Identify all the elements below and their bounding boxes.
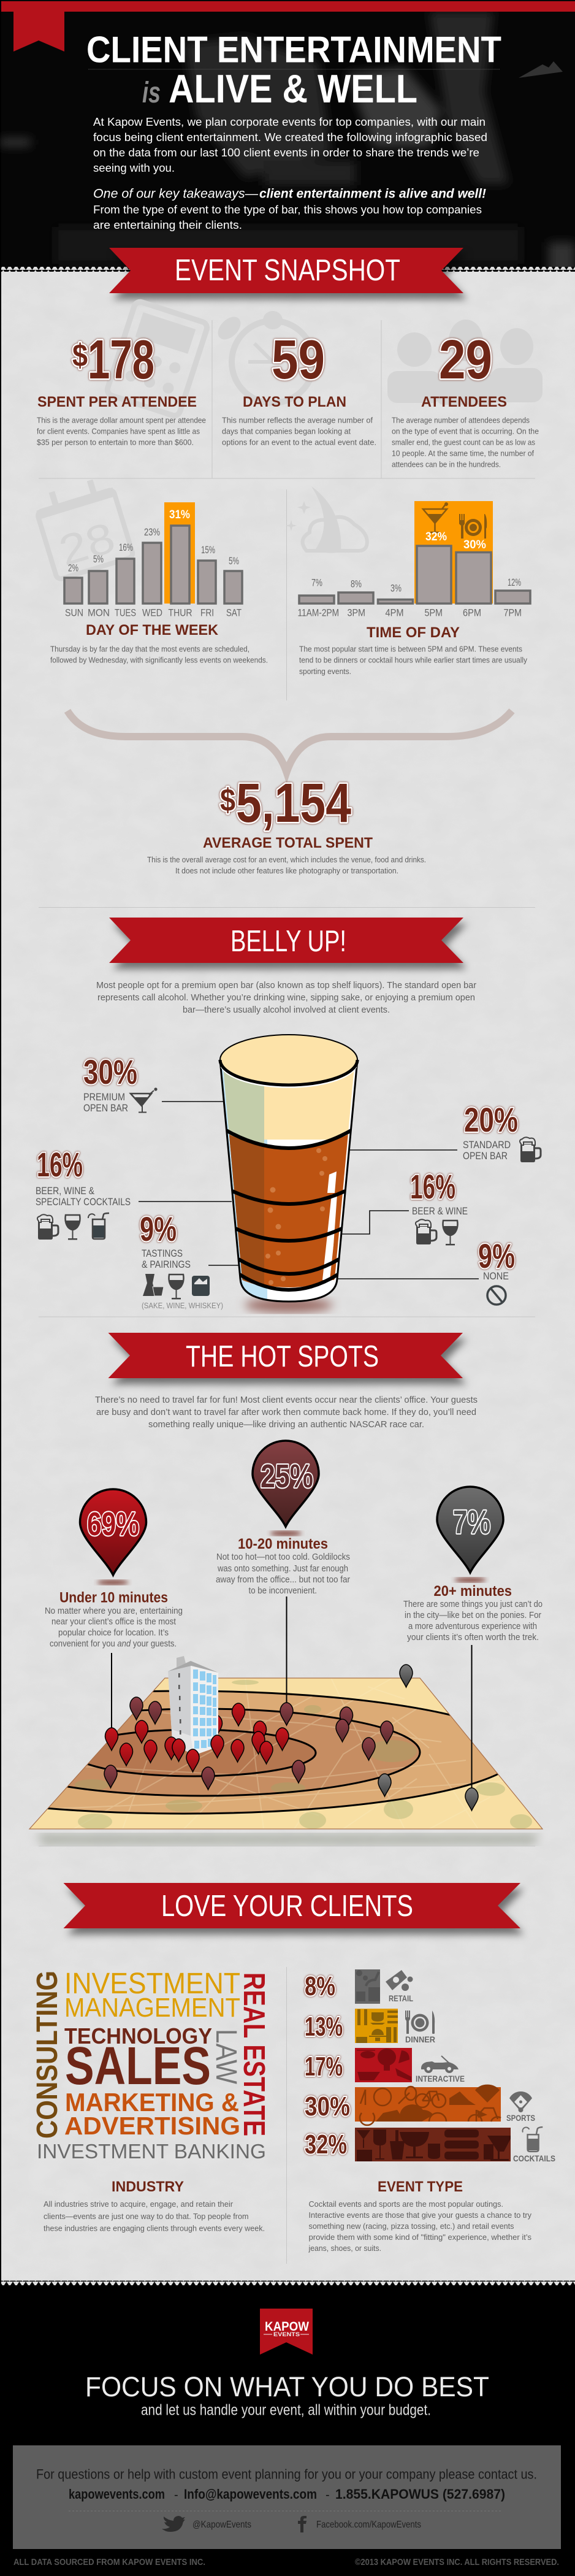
text: under 10 minutes: near your client’s office is the most [51,1617,177,1627]
text: industry: clients—events are just one way to do that. Top people from [44,2212,249,2221]
chart: time of day: 32% [425,531,447,543]
pin: 7 percent: 7% [453,1504,490,1541]
chart: day of the week: 15% [201,544,215,556]
chart: time of day: 5PM [424,607,443,618]
stat: spent per attendee: SPENT PER ATTENDEE [37,394,197,410]
text: 20+ minutes: a more adventurous experience with [408,1621,537,1631]
key takeaway paragraph: are entertaining their clients. [93,218,242,231]
map parks [75,1680,532,1830]
chart: time of day: 7% [311,577,322,589]
header: dark photo background [0,0,575,285]
map [0,1678,543,1845]
stat: days to plan: options for an event to the actual event date. [222,438,376,447]
contact panel: 1.855.KAPOWUS (527.6987) [335,2486,505,2502]
bar: dinner 13% [305,2009,435,2044]
callout: premium open bar: 30% [83,1052,137,1091]
word cloud: industries: REAL ESTATE [237,1972,270,2136]
stat: attendees: 29 [439,329,492,391]
callout: tastings and pairings [140,1209,238,1310]
text: industry: these industries are engaging clients through events every week. [44,2224,265,2233]
contact panel: Info@kapowevents.com [184,2486,317,2502]
text: 10-20 minutes [216,1536,350,1596]
contact panel: - [326,2488,330,2502]
chart: time of day: 12% [508,577,521,588]
chart: time of day: 8% [351,578,362,590]
office building [168,1656,218,1755]
chart: time of day: 3PM [347,607,365,618]
stat: attendees: attendees can be in the hundreds. [392,460,501,469]
stat: average total spent: 5,154 [236,773,351,834]
banner: the hot spots: THE HOT SPOTS [186,1340,379,1373]
chart: day of the week: Thursday is by far the day that the most events are scheduled, [50,645,249,654]
callout: standard open bar: 20% [464,1100,518,1139]
icons: mug, wine [416,1219,457,1245]
hot spots intro: are busy and don’t want to travel far after work then commute back home. If they do, you’ll need [96,1407,476,1417]
paper background [1,267,575,2285]
chart: day of the week: FRI [200,607,214,618]
pin: 69 percent: 69% [87,1506,139,1543]
bar: cocktails 32%: COCKTAILS [513,2153,555,2163]
chart: day of the week: SUN [65,607,83,618]
chart: time of day: sporting events. [299,667,351,676]
bar: interactive 17% [305,2048,465,2083]
chart: day of the week: 31% [169,508,190,521]
icon: no symbol [487,1286,506,1305]
word cloud: industries: INVESTMENT [64,1968,240,2000]
banner: love your clients [64,1883,520,1928]
stat: spent per attendee: This is the average dollar amount spent per attendee [37,416,206,424]
stat: spent per attendee: 178 [88,329,154,391]
icon: car [421,2056,459,2073]
text: event type: Cocktail events and sports are the most popular outings. [309,2200,503,2209]
contact panel: kapowevents.com [69,2486,165,2502]
bar: sports 30%: SPORTS [506,2113,535,2123]
text: 20+ minutes: in the city—like bet on the ponies. For [405,1610,541,1620]
background icon: attendees [387,320,543,405]
map roads [55,1679,503,1828]
contact panel: - [174,2488,178,2502]
chart: time of day: 7PM [504,607,522,618]
word cloud: industries: TECHNOLOGY [64,2023,212,2049]
icon: baseball diamond [509,2091,532,2112]
background icon: calculator [106,301,208,417]
word cloud: industries: MANAGEMENT [64,1993,240,2023]
key takeaway paragraph: One of our key takeaways— [93,186,259,201]
word cloud: industries: LAW [210,2029,242,2085]
callout: tastings and pairings: 9% [140,1209,177,1248]
closing headline: and let us handle your event, all within your budget. [141,2402,431,2419]
bar: cocktails 32%: 32% [305,2129,347,2160]
header red band [1,1,575,12]
intro paragraph: on the data from our last 100 client events in order to share the trends we’re [93,146,479,159]
text: under 10 minutes: convenient for you and your guests. [50,1639,177,1649]
stat: attendees: smaller end, the guest count can be as low as [392,438,535,447]
title: is [142,77,161,109]
contact panel: For questions or help with custom event planning for you or your company please contact us. [36,2467,537,2482]
background icon: moon and cloud [286,486,367,553]
stat: days to plan [222,329,376,447]
chart: day of the week: 2% [68,562,78,574]
word cloud: industries: SALES [65,2036,211,2096]
word cloud: industries: ADVERTISING [64,2112,240,2140]
callout: beer, wine and specialty cocktails: 16% [37,1145,83,1184]
bar: interactive 17%: 17% [305,2052,343,2082]
word cloud: industries: INVESTMENT BANKING [37,2140,266,2163]
text: under 10 minutes: popular choice for location. It’s [58,1628,169,1638]
chart: day of the week: 16% [119,542,133,553]
stat: average total spent: This is the overall average cost for an event, which includes the venue, food and drinks. [147,856,426,864]
chart: day of the week: TUES [115,607,136,618]
pins behind building [130,1697,222,1738]
stat: attendees: on the type of event that is occurring. On the [392,427,539,435]
title: ALIVE & WELL [169,66,417,111]
stat: spent per attendee [37,329,206,447]
chart: day of the week: 23% [144,526,160,538]
callout: standard open bar [350,1100,541,1162]
banner: love your clients: LOVE YOUR CLIENTS [161,1890,413,1923]
leader lines [112,1597,472,1789]
chart: time of day: 4PM [385,607,403,618]
intro paragraph: At Kapow Events, we plan corporate events for top companies, with our main [93,115,486,128]
text: industry: INDUSTRY [112,2179,184,2195]
icon: twitter bird [162,2516,185,2532]
icon: money [386,1970,413,1991]
callout: tastings and pairings: & PAIRINGS [142,1259,191,1270]
icon: martini glass [131,1087,158,1113]
callout: beer, wine and specialty cocktails [36,1145,232,1240]
banner: belly up [109,918,463,963]
contact panel [13,2445,561,2549]
text: industry: All industries strive to acquire, engage, and retain their [44,2200,233,2209]
belly up intro: represents call alcohol. Whether you’re drinking wine, sipping sake, or enjoying a premium open [97,992,475,1003]
belly up intro [96,980,476,1015]
text: 20+ minutes [403,1583,543,1643]
bar: retail 8%: RETAIL [389,1993,413,2003]
callout: beer, wine and specialty cocktails: BEER, WINE & [36,1185,95,1197]
callout: beer and wine: 16% [410,1167,455,1206]
intro paragraph: focus being client entertainment. We created the following infographic based [93,131,487,144]
chart: day of the week: THUR [168,607,192,618]
key takeaway paragraph: From the type of event to the type of bar, this shows you how top companies [93,203,482,216]
text: 20+ minutes: There are some things you just can’t do [403,1599,543,1609]
contact panel: @KapowEvents [192,2520,251,2530]
stat: average total spent: $ [220,783,235,818]
footer credits: ALL DATA SOURCED FROM KAPOW EVENTS INC. [13,2557,205,2567]
chart: time of day: TIME OF DAY [367,624,460,641]
chart: time of day: 11AM-2PM [298,607,339,618]
background icon: calendar [32,475,134,580]
banner: event snapshot [109,248,463,293]
belly up intro: bar—there’s usually alcohol involved at client events. [183,1005,390,1015]
stat: spent per attendee: $ [72,338,88,374]
text: event type: Interactive events are those that give your guests a chance to try [309,2211,532,2220]
chart: time of day: 30% [463,539,486,551]
icon: plate and cutlery [459,514,487,539]
text: 10-20 minutes: away from the office... but not too far [216,1574,350,1585]
stat: average total spent [147,773,426,875]
chart: day of the week: followed by Wednesday, with significantly less events on weekends. [50,656,268,665]
stat: attendees: 10 people. At the same time, the number of [392,449,534,458]
chart: day of the week: 5% [229,555,239,567]
chart: day of the week: DAY OF THE WEEK [86,622,219,638]
brace [67,711,512,772]
stat: days to plan: days that companies began looking at [222,427,351,435]
callout: none: 9% [478,1236,515,1275]
bar: cocktails 32% [305,2127,555,2163]
text: event type: something new (racing, pizza tossing, etc.) and retail events [309,2222,514,2231]
callout: premium open bar [83,1052,223,1114]
callout: none [337,1236,515,1305]
bar: retail 8%: 8% [305,1971,335,2001]
map pins [104,1665,478,1811]
key takeaway paragraph: client entertainment is alive and well! [259,186,486,201]
text: event type: jeans, shoes, or suits. [308,2244,381,2253]
callout: none: NONE [483,1270,509,1282]
word cloud: industries: CONSULTING [31,1971,64,2139]
logo: kapow events: EVENTS [273,2331,300,2338]
text: event type: provide them with some kind of "fitting" experience, whether it’s [309,2233,531,2242]
closing headline: FOCUS ON WHAT YOU DO BEST [85,2371,489,2402]
callout: beer and wine: BEER & WINE [412,1205,468,1217]
bar: sports 30%: 30% [305,2091,350,2122]
stat: days to plan: 59 [272,329,325,391]
closing headline [85,2371,489,2419]
stat: days to plan: DAYS TO PLAN [243,394,346,410]
intro paragraph: seeing with you. [93,161,175,174]
stat: attendees: The average number of attendees depends [392,416,530,424]
text: industry [44,2179,265,2233]
icon: cocktail [522,2127,543,2152]
belly up intro: Most people opt for a premium open bar (also known as top shelf liquors). The standard open bar [96,980,476,991]
word cloud: industries [31,1968,270,2163]
chart: time of day: The most popular start time is between 5PM and 6PM. These events [299,645,522,654]
icon: martini [423,502,448,532]
icon: beer mug [520,1137,541,1162]
pin: 7 percent [437,1487,503,1582]
callout: standard open bar: STANDARD [463,1139,511,1151]
stat: days to plan: This number reflects the average number of [222,416,373,424]
icons: mug, wine, cocktail [37,1213,109,1240]
icon: plate and cutlery [405,2011,435,2034]
title [86,29,501,111]
chart: day of the week: SAT [226,607,242,618]
bar: interactive 17%: INTERACTIVE [416,2074,465,2083]
icons: sake, wine, whiskey [143,1274,210,1299]
logo: kapow events [260,2309,313,2355]
hot spots intro: There’s no need to travel far for fun! Most client events occur near the clients’ office. Your guests [95,1395,478,1405]
chart: day of the week: WED [142,607,162,618]
text: event type: EVENT TYPE [378,2179,463,2195]
bar: dinner 13%: DINNER [405,2034,435,2044]
stat: average total spent: It does not include other features like photography or transportation. [175,867,398,875]
bar: dinner 13%: 13% [305,2012,343,2042]
header bookmark ribbon [13,12,64,52]
text: 10-20 minutes: 10-20 minutes [238,1536,328,1552]
text: under 10 minutes: Under 10 minutes [59,1590,168,1606]
pin: 25 percent [253,1441,319,1536]
callout: beer, wine and specialty cocktails: SPECIALTY COCKTAILS [36,1196,131,1208]
text: 10-20 minutes: was onto something. Just far enough [217,1563,348,1574]
stat: spent per attendee: $35 per person to entertain to more than $600. [37,438,194,447]
callout: standard open bar: OPEN BAR [463,1150,508,1162]
banner: the hot spots [108,1333,463,1378]
hot spots intro: something really unique—like driving an authentic NASCAR race car. [148,1419,424,1430]
stat: attendees: ATTENDEES [421,394,507,410]
text: 20+ minutes: your clients it’s often worth the trek. [407,1632,539,1643]
chart: time of day: 6PM [463,607,481,618]
chart: day of the week [50,502,268,665]
pin: 25 percent: 25% [261,1458,313,1495]
key takeaway paragraph [93,186,486,231]
callout: tastings and pairings: TASTINGS [142,1248,183,1259]
text: under 10 minutes [45,1590,183,1649]
callout: premium open bar: PREMIUM [83,1091,125,1103]
callout: beer and wine [341,1167,468,1245]
text: event type [308,2179,532,2253]
callout: premium open bar: OPEN BAR [83,1102,128,1114]
beer glass [215,1035,362,1313]
bar: retail 8% [305,1969,413,2004]
chart: time of day [298,501,530,676]
background icon: calendar: 28 [53,513,120,575]
background icon: stopwatch [214,311,314,403]
title: CLIENT ENTERTAINMENT [86,29,501,70]
chart: time of day: 3% [390,583,402,594]
footer credits [13,2557,559,2567]
stat: spent per attendee: for client events. Companies have spent as little as [37,427,200,435]
banner: belly up: BELLY UP! [230,925,346,958]
chart: day of the week: 5% [93,553,104,565]
bar: sports 30% [305,2085,535,2125]
intro paragraph [93,115,487,174]
stat: average total spent: AVERAGE TOTAL SPENT [203,835,373,851]
contact panel: Facebook.com/KapowEvents [316,2520,421,2530]
pin: 69 percent [80,1489,146,1585]
chart: time of day: tend to be dinners or cocktail hours while earlier start times are usually [299,656,528,665]
text: 20+ minutes: 20+ minutes [434,1583,512,1600]
logo: kapow events: KAPOW [265,2320,309,2334]
word cloud: industries: MARKETING & [65,2088,239,2117]
icon: facebook f [298,2516,307,2532]
banner: event snapshot: EVENT SNAPSHOT [175,254,400,287]
text: under 10 minutes: No matter where you are, entertaining [45,1606,183,1616]
text: 10-20 minutes: to be inconvenient. [249,1585,317,1596]
callout: tastings and pairings: (SAKE, WINE, WHISKEY) [142,1301,223,1310]
hot spots intro [95,1395,478,1430]
chart: day of the week: MON [88,607,110,618]
stat: attendees [392,329,539,469]
text: 10-20 minutes: Not too hot—not too cold. Goldilocks [216,1552,350,1562]
